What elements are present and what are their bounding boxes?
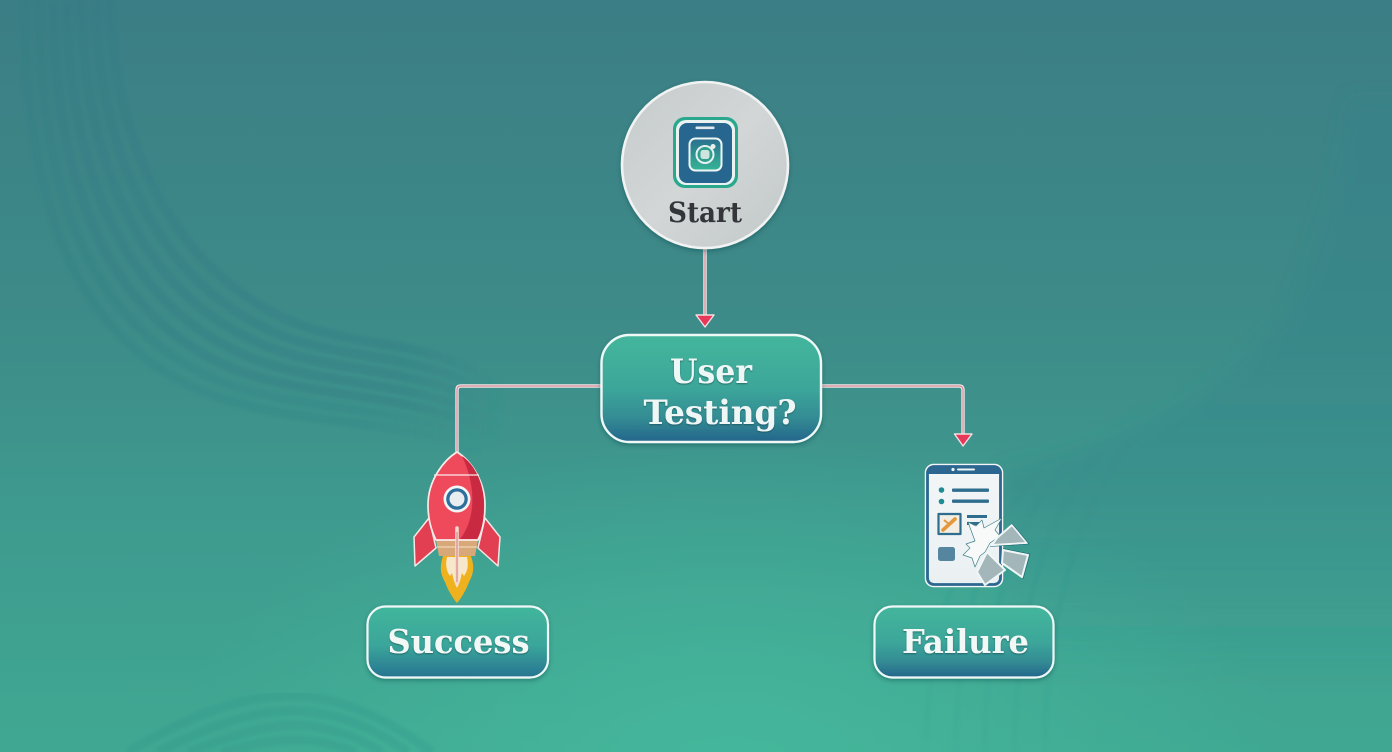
nozzle [436, 540, 478, 556]
outcome: failure [874, 606, 1054, 678]
flame [441, 556, 473, 603]
connector: start to user testing [696, 248, 714, 327]
center strut [455, 528, 459, 584]
outcome: failure: Failure [902, 622, 1029, 661]
icon: phone with camera [673, 117, 738, 188]
outcome: success: Success [388, 622, 530, 661]
label: testing: Testing? [644, 393, 796, 433]
connector: user testing to success [457, 386, 602, 453]
shattered shards [963, 518, 1030, 585]
window [444, 486, 470, 512]
outcome: success [368, 606, 548, 678]
label: user: User [670, 352, 753, 392]
fins [414, 518, 436, 566]
body [428, 452, 485, 540]
label: start: Start [668, 196, 742, 229]
icon: rocket [414, 452, 500, 603]
decision node: user testing [602, 335, 821, 442]
icon: broken phone [926, 464, 1030, 586]
connector: user testing to failure [820, 386, 972, 446]
start node [622, 82, 788, 248]
